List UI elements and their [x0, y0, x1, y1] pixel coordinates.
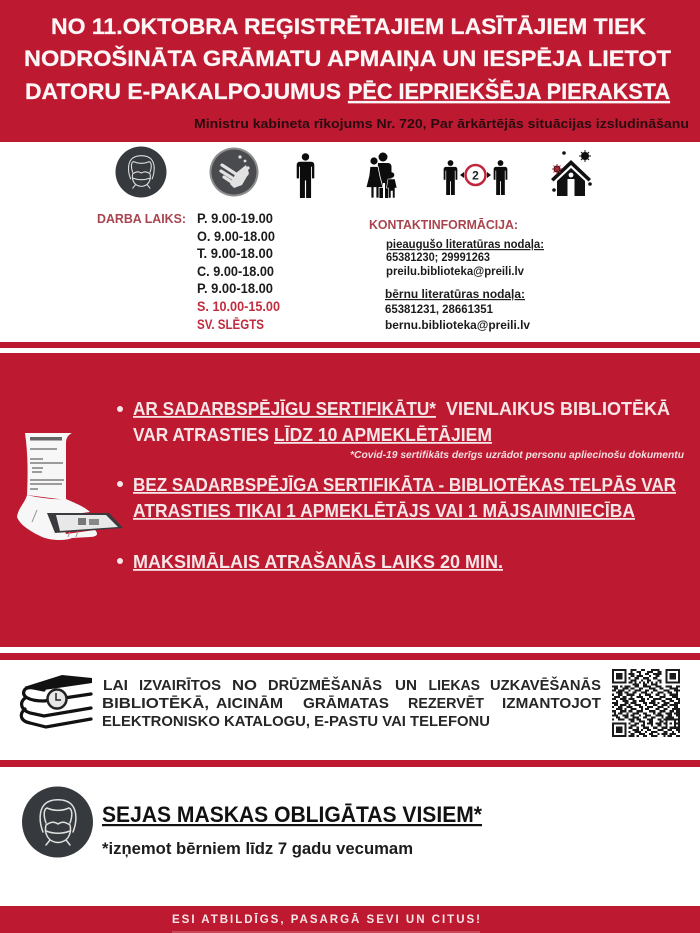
opening hours list: O. 9.00-18.00	[197, 229, 275, 244]
opening hours list: SV. SLĒGTS	[197, 317, 264, 332]
booking text: LIEKAS	[428, 677, 480, 694]
icon: face mask large	[22, 786, 93, 858]
contact information: 65381231, 28661351	[385, 302, 493, 316]
contact information	[369, 217, 544, 332]
booking text: UZKAVĒŠANĀS	[490, 676, 601, 694]
icon: hand washing	[210, 148, 258, 196]
header band	[0, 0, 700, 142]
contact information: KONTAKTINFORMĀCIJA:	[369, 217, 518, 232]
icon: stay home	[551, 150, 592, 196]
opening hours list: P. 9.00-19.00	[197, 211, 273, 226]
booking text: AICINĀM	[216, 695, 283, 712]
bullet: vaccination certificate: AR SADARBSPĒJĪGU SERTIFIKĀTU*	[133, 399, 436, 419]
title: PĒC IEPRIEKŠĒJA PIERAKSTA	[348, 79, 670, 104]
contact information: bernu.biblioteka@preili.lv	[385, 318, 530, 332]
QR code	[612, 669, 680, 737]
title	[24, 14, 671, 104]
divider band	[0, 342, 700, 348]
opening hours list: C. 9.00-18.00	[197, 264, 274, 279]
bullet: vaccination certificate	[117, 399, 670, 445]
title: DATORU E-PAKALPOJUMUS	[25, 79, 341, 104]
contact information: bērnu literatūras nodaļa:	[385, 287, 525, 301]
icon: family	[366, 152, 397, 198]
booking text: LAI	[103, 677, 128, 694]
footnote: *Covid-19 sertifikāts derīgs uzrādot personu apliecinošu dokumentu	[350, 449, 685, 461]
title: NO 11.OKTOBRA REĢISTRĒTAJIEM LASĪTĀJIEM TIEK	[51, 14, 647, 39]
opening hours list: T. 9.00-18.00	[197, 246, 273, 261]
booking text: ELEKTRONISKO KATALOGU, E-PASTU VAI TELEFONU	[102, 713, 490, 730]
booking text: GRĀMATAS	[303, 695, 389, 712]
icon: two metre distance: 2	[472, 168, 479, 182]
bullet: vaccination certificate: VAR ATRASTIES	[133, 425, 269, 445]
bullet: vaccination certificate: LĪDZ 10 APMEKLĒTĀJIEM	[274, 425, 492, 445]
booking text: IZMANTOJOT	[502, 695, 601, 712]
bullet: maximum stay: MAKSIMĀLAIS ATRAŠANĀS LAIKS 20 MIN.	[133, 551, 503, 572]
footer band	[0, 906, 700, 933]
booking text: DRŪZMĒŠANĀS	[268, 676, 382, 694]
contact information: preilu.biblioteka@preili.lv	[386, 264, 524, 278]
icon: face mask	[116, 146, 166, 198]
booking text: UN	[395, 677, 417, 694]
icon: hand with phone and certificate	[17, 433, 123, 540]
divider band	[0, 653, 700, 660]
mask requirement heading: SEJAS MASKAS OBLIGĀTAS VISIEM*	[102, 802, 482, 827]
booking text: BIBLIOTĒKĀ,	[102, 695, 209, 712]
booking text: NO	[232, 677, 257, 694]
contact information: 65381230; 29991263	[386, 250, 490, 264]
opening hours list	[197, 211, 280, 332]
opening hours list: P. 9.00-18.00	[197, 281, 273, 296]
footer slogan: ESI ATBILDĪGS, PASARGĀ SEVI UN CITUS!	[172, 914, 480, 926]
icon: two metre distance	[444, 160, 507, 195]
icon: person	[297, 153, 314, 198]
title: NODROŠINĀTA GRĀMATU APMAIŅA UN IESPĒJA LIETOT	[24, 46, 671, 71]
bullet: without certificate: ATRASTIES TIKAI 1 APMEKLĒTĀJS VAI 1 MĀJSAIMNIECĪBA	[133, 501, 635, 521]
booking text	[102, 676, 601, 730]
opening hours list: S. 10.00-15.00	[197, 299, 280, 314]
bullet: without certificate	[117, 475, 676, 521]
booking text: IZVAIRĪTOS	[139, 677, 221, 694]
icon: books with clock	[21, 675, 92, 727]
legal reference: Ministru kabineta rīkojums Nr. 720, Par ārkārtējās situācijas izsludināšanu	[194, 117, 689, 131]
booking text: REZERVĒT	[408, 695, 484, 712]
divider band	[0, 760, 700, 767]
bullet list	[117, 399, 685, 572]
bullet: vaccination certificate: VIENLAIKUS BIBLIOTĒKĀ	[446, 399, 670, 419]
opening hours label: DARBA LAIKS:	[97, 212, 186, 226]
panel: visitor rules	[0, 353, 700, 647]
mask exemption note: *izņemot bērniem līdz 7 gadu vecumam	[102, 840, 413, 858]
contact information: pieaugušo literatūras nodaļa:	[386, 237, 544, 251]
bullet: without certificate: BEZ SADARBSPĒJĪGA SERTIFIKĀTA - BIBLIOTĒKAS TELPĀS VAR	[133, 475, 676, 495]
